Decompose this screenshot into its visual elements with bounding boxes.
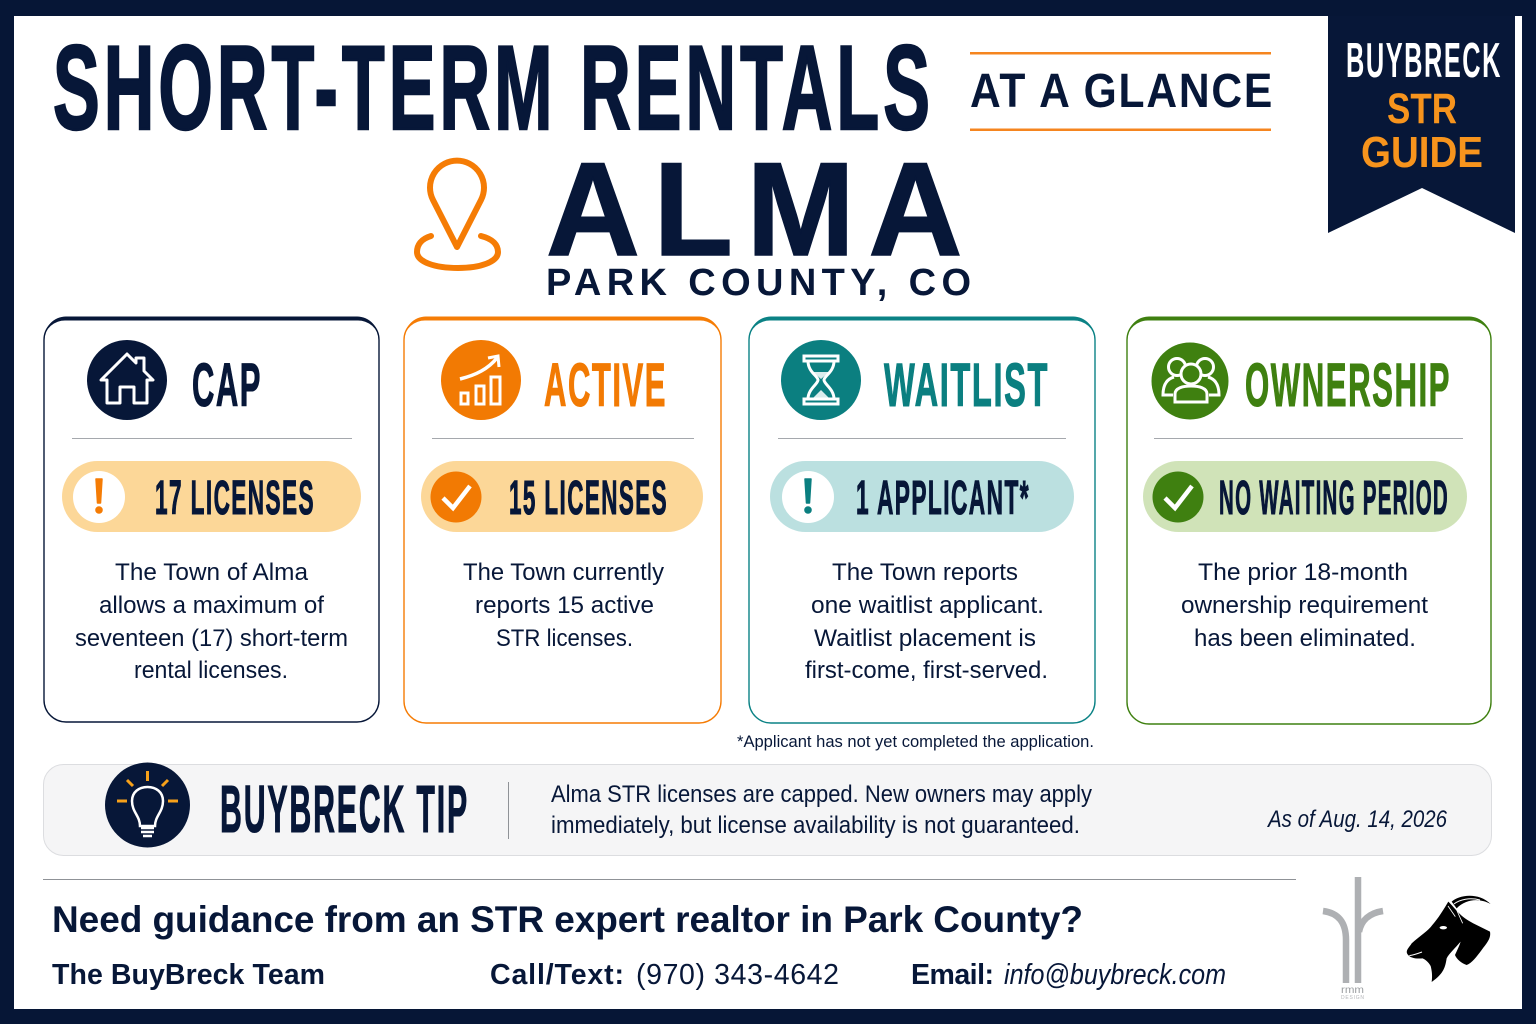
tip text: immediately, but license availability is not guaranteed. bbox=[551, 812, 1080, 839]
tip text bbox=[551, 781, 1093, 839]
panel: waitlist bbox=[749, 316, 1095, 723]
description: active: STR licenses. bbox=[496, 625, 633, 652]
icon: house bbox=[87, 340, 167, 420]
status pill: 17 licenses bbox=[62, 461, 361, 532]
icon: light bulb bbox=[105, 762, 190, 848]
status pill: no waiting period bbox=[1143, 461, 1467, 532]
description: active: The Town currently bbox=[463, 559, 665, 586]
heading: cap: CAP bbox=[192, 351, 262, 419]
contact details: The BuyBreck Team bbox=[52, 959, 325, 991]
description: waitlist: one waitlist applicant. bbox=[811, 592, 1044, 619]
contact details: Email: bbox=[911, 959, 994, 991]
icon: people bbox=[1152, 342, 1228, 420]
location name: PARK COUNTY, CO bbox=[546, 262, 971, 304]
description: cap: rental licenses. bbox=[134, 657, 288, 684]
description: waitlist bbox=[805, 559, 1048, 684]
tip text: Alma STR licenses are capped. New owners may apply bbox=[551, 781, 1093, 808]
heading: waitlist: WAITLIST bbox=[884, 351, 1049, 419]
logo: goat bbox=[1407, 896, 1491, 982]
ribbon badge: GUIDE bbox=[1361, 128, 1483, 177]
description: cap: The Town of Alma bbox=[115, 559, 308, 586]
description: waitlist: The Town reports bbox=[832, 559, 1018, 586]
title: SHORT-TERM RENTALS bbox=[53, 21, 934, 155]
description: cap bbox=[75, 559, 348, 684]
tip banner: BUYBRECK TIP bbox=[220, 772, 469, 847]
description: waitlist: Waitlist placement is bbox=[814, 625, 1036, 652]
logo: rmm design: rmm bbox=[1341, 985, 1364, 996]
icon: location pin bbox=[417, 161, 498, 268]
description: cap: allows a maximum of bbox=[99, 592, 324, 619]
contact details bbox=[52, 959, 1226, 991]
description: waitlist: first-come, first-served. bbox=[805, 657, 1048, 684]
status pill: 15 licenses: 15 LICENSES bbox=[509, 472, 668, 525]
description: active bbox=[463, 559, 665, 652]
date: As of Aug. 14, 2026 bbox=[1266, 806, 1448, 833]
icon: hourglass bbox=[781, 340, 861, 420]
status pill: 15 licenses bbox=[421, 461, 703, 532]
icon: rising chart bbox=[441, 340, 521, 420]
status pill: 17 licenses: 17 LICENSES bbox=[155, 472, 315, 525]
heading: active: ACTIVE bbox=[544, 351, 667, 419]
panel: cap bbox=[44, 316, 379, 722]
description: cap: seventeen (17) short-term bbox=[75, 625, 348, 652]
logo: rmm design bbox=[1323, 877, 1383, 1001]
panel: active bbox=[404, 316, 721, 723]
location name: ALMA bbox=[546, 136, 976, 284]
status pill: 1 applicant bbox=[770, 461, 1074, 532]
description: active: reports 15 active bbox=[475, 592, 654, 619]
ribbon badge bbox=[1328, 16, 1515, 233]
panel: ownership bbox=[1127, 316, 1491, 724]
contact heading: Need guidance from an STR expert realtor in Park County? bbox=[52, 899, 1083, 940]
contact details: (970) 343-4642 bbox=[636, 959, 839, 991]
description: ownership: The prior 18-month bbox=[1198, 559, 1408, 586]
subtitle: at a glance: AT A GLANCE bbox=[970, 65, 1274, 118]
tip banner bbox=[44, 762, 1492, 856]
footnote: *Applicant has not yet completed the application. bbox=[737, 733, 1094, 751]
status pill: 1 applicant: 1 APPLICANT* bbox=[856, 472, 1030, 525]
contact details: info@buybreck.com bbox=[1004, 959, 1226, 991]
contact details: Call/Text: bbox=[490, 959, 624, 991]
logo: rmm design: DESIGN bbox=[1341, 995, 1364, 1001]
description: ownership bbox=[1181, 559, 1428, 652]
description: ownership: ownership requirement bbox=[1181, 592, 1428, 619]
ribbon badge: STR bbox=[1387, 85, 1457, 133]
description: ownership: has been eliminated. bbox=[1194, 625, 1416, 652]
